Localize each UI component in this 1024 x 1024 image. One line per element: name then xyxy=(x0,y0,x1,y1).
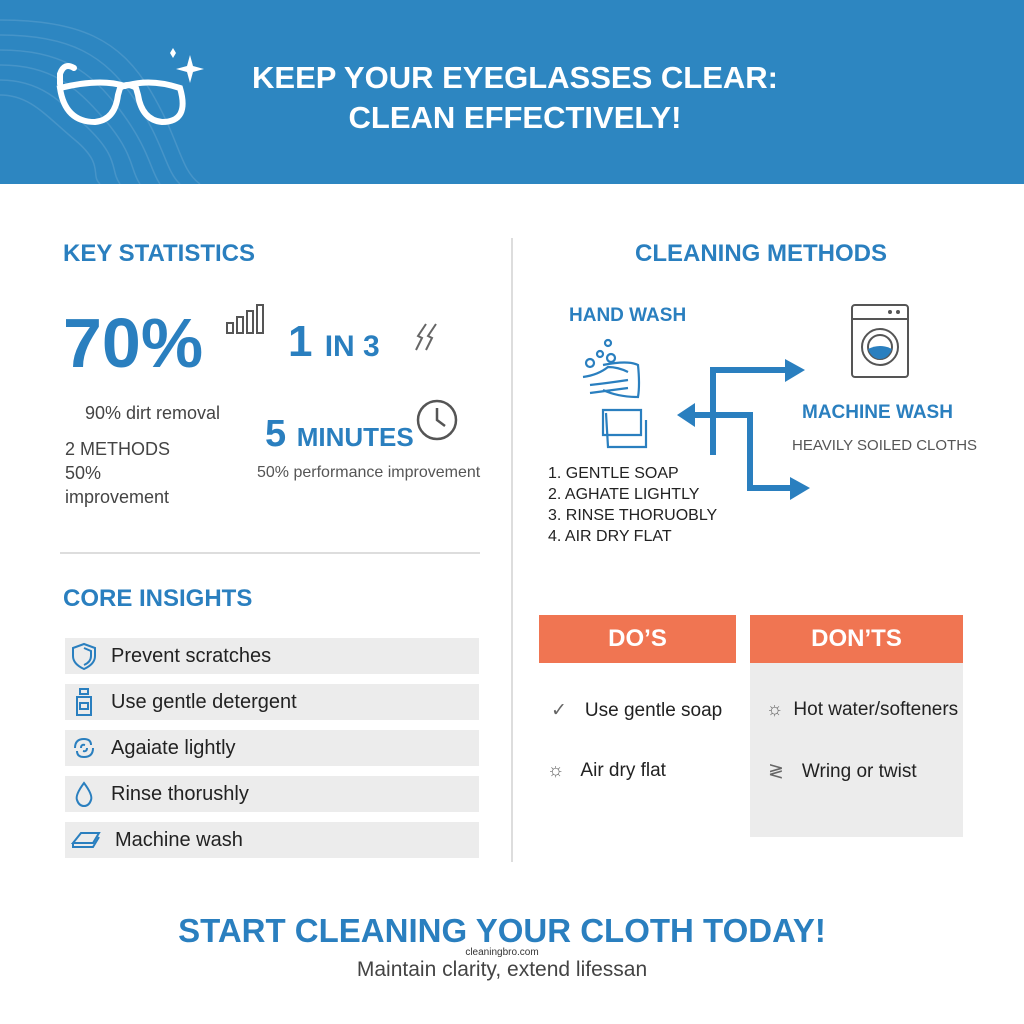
heading: cleaning methods: CLEANING METHODS xyxy=(635,240,887,267)
header: don'ts xyxy=(750,615,963,663)
vertical divider xyxy=(511,238,513,862)
list: hand wash steps: 1. GENTLE SOAP xyxy=(548,465,679,482)
icon: hand washing cloth xyxy=(582,338,648,448)
title: KEEP YOUR EYEGLASSES CLEAR: xyxy=(252,60,778,95)
stat 1 in 3: 1 IN 3 xyxy=(288,317,380,366)
icon: bar chart xyxy=(226,304,264,334)
list: hand wash steps: 2. AGHATE LIGHTLY xyxy=(548,486,699,503)
panel: do's xyxy=(539,615,736,781)
panel: key statistics xyxy=(63,240,480,507)
title xyxy=(252,60,778,135)
panel: key statistics: 90% dirt removal xyxy=(85,403,220,423)
footer call to action: Maintain clarity, extend lifessan xyxy=(357,958,647,981)
panel: key statistics: 50% xyxy=(65,463,101,483)
stat 5 minutes: 5 MINUTES xyxy=(265,413,414,455)
label: machine wash: MACHINE WASH xyxy=(802,402,953,423)
item: hot water: ☼ Hot water/softeners xyxy=(766,699,958,720)
icon: eyeglasses with sparkles xyxy=(56,48,204,125)
row: gentle detergent: Use gentle detergent xyxy=(111,690,297,712)
row: agitate: Agaiate lightly xyxy=(111,736,236,758)
item: air dry: ☼ Air dry flat xyxy=(547,760,666,781)
item: gentle soap: ✓ Use gentle soap xyxy=(551,700,722,721)
panel: key statistics: 50% performance improvement xyxy=(257,464,480,481)
row: machine wash xyxy=(65,822,479,858)
icon: zigzag xyxy=(415,324,437,350)
row: rinse: Rinse thorushly xyxy=(111,782,249,804)
arrows: branching xyxy=(677,359,810,500)
panel: key statistics: 2 METHODS xyxy=(65,439,170,459)
heading: core insights: CORE INSIGHTS xyxy=(63,585,252,612)
row: prevent scratches: Prevent scratches xyxy=(111,644,271,666)
list: hand wash steps xyxy=(548,465,717,545)
panel: cleaning methods xyxy=(548,240,977,545)
header banner xyxy=(0,0,1024,184)
stat 70%: 70% xyxy=(63,304,203,382)
footer call to action: cleaningbro.com xyxy=(465,947,539,958)
footer call to action: START CLEANING YOUR CLOTH TODAY! xyxy=(178,912,826,949)
panel: don'ts xyxy=(750,615,963,837)
list: hand wash steps: 4. AIR DRY FLAT xyxy=(548,528,672,545)
panel: key statistics: improvement xyxy=(65,487,169,507)
item: wring: ≷ Wring or twist xyxy=(768,761,917,782)
row: machine wash: Machine wash xyxy=(115,828,243,850)
icon: clock xyxy=(416,400,458,440)
list: hand wash steps: 3. RINSE THORUOBLY xyxy=(548,507,717,524)
label: hand wash: HAND WASH xyxy=(569,305,686,326)
heading: key statistics: KEY STATISTICS xyxy=(63,240,255,267)
row: prevent scratches xyxy=(65,638,479,674)
panel: cleaning methods: HEAVILY SOILED CLOTHS xyxy=(792,437,977,454)
row: agitate xyxy=(65,730,479,766)
row: rinse xyxy=(65,776,479,812)
header: do's xyxy=(539,615,736,663)
icon: washing machine xyxy=(851,304,909,378)
header: don'ts: DON’TS xyxy=(811,625,902,652)
row: gentle detergent xyxy=(65,684,479,720)
footer call to action xyxy=(178,912,826,981)
title: CLEAN EFFECTIVELY! xyxy=(348,100,682,135)
header: do's: DO’S xyxy=(608,625,667,652)
